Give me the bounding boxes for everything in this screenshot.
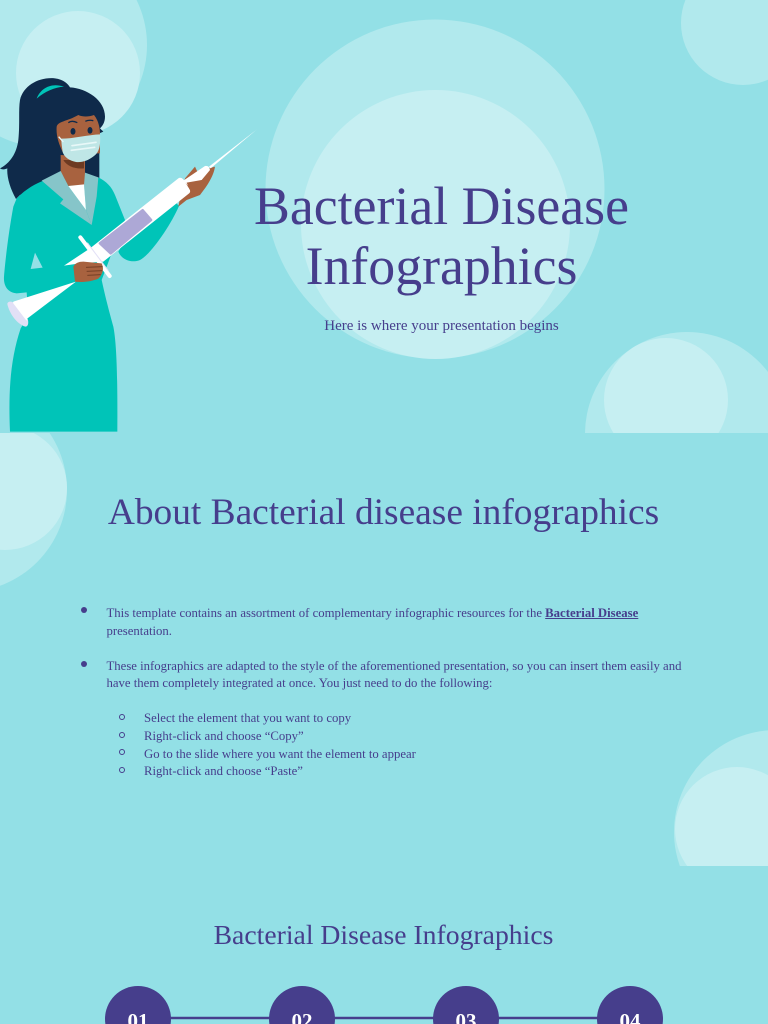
syringe barrel — [64, 178, 190, 266]
mask — [61, 134, 100, 162]
bullet two — [81, 661, 87, 667]
sub bullets — [119, 714, 125, 773]
hairband — [37, 85, 64, 99]
paragraph one line one: This template contains an assortment of complementary infographic resources for the Bacterial Disease — [106, 606, 638, 620]
paragraph two line one: These infographics are adapted to the style of the aforementioned presentation, so you can insert them easily and — [106, 658, 681, 672]
step one: Select the element that you want to copy — [144, 711, 351, 725]
step two: Right-click and choose “Copy” — [144, 728, 304, 742]
face — [57, 115, 100, 153]
shirt — [68, 184, 86, 210]
coat body — [4, 177, 125, 432]
bullet one — [81, 607, 87, 613]
step 03 — [433, 986, 499, 1024]
coat sleeve — [118, 200, 179, 261]
paragraph one line two: presentation. — [106, 624, 172, 638]
paragraph two line two: have them completely integrated at once. You just need to do the following: — [106, 676, 492, 690]
eyes — [70, 128, 75, 135]
right hand — [178, 167, 215, 207]
subtitle: Here is where your presentation begins — [324, 318, 559, 334]
lapels — [42, 171, 92, 225]
neck — [61, 155, 85, 186]
title — [254, 176, 629, 296]
title: Bacterial Disease — [254, 176, 629, 236]
about heading: About Bacterial disease infographics — [108, 492, 659, 532]
syringe fluid — [100, 210, 151, 253]
plunger — [13, 282, 76, 319]
section heading: Bacterial Disease Infographics — [214, 918, 553, 950]
needle — [209, 129, 257, 168]
about body text — [81, 606, 682, 778]
plunger rim — [7, 302, 28, 327]
title: Infographics — [306, 236, 577, 296]
arm gap — [31, 253, 43, 269]
step 04 — [597, 986, 663, 1024]
left hand — [73, 262, 103, 282]
step four: Right-click and choose “Paste” — [144, 764, 303, 778]
syringe nose — [183, 166, 210, 186]
hair — [0, 78, 105, 199]
step 02 — [269, 986, 335, 1024]
step three: Go to the slide where you want the element to appear — [144, 746, 416, 760]
step 01 — [105, 986, 171, 1024]
syringe flange — [80, 237, 110, 276]
fingers — [187, 180, 202, 192]
